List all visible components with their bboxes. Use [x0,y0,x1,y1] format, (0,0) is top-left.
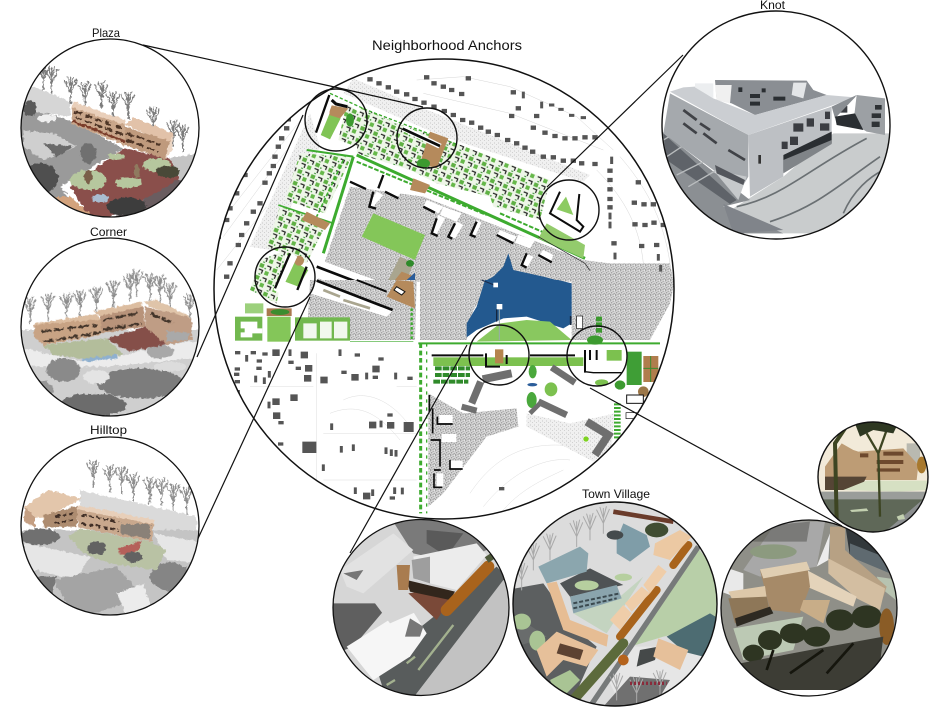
leader lines [143,45,842,553]
east trees and courts [527,317,658,442]
housing clusters [250,103,550,303]
ground [733,133,893,233]
right wing [832,95,857,118]
landscape islands [70,170,107,190]
stippled road verge north [343,78,590,182]
ring: Knot [539,180,599,240]
existing gray buildings [462,367,608,455]
water south [467,280,572,337]
west green blocks [235,303,350,342]
trees and blocks [23,130,77,160]
label: Hilltop: Hilltop [90,423,127,437]
panel: courtyard view small [813,418,933,537]
panel: site plan circle [214,59,675,519]
south half of plan [234,280,675,513]
building [72,102,125,127]
south black buildings [429,395,463,487]
panel: Plaza view [13,39,203,220]
leader: Knot to anchor [547,55,683,187]
greens [575,580,599,590]
stippled ground [317,187,675,290]
plan circle background [214,59,674,519]
leader: Plaza to anchor [143,45,423,107]
ground [22,110,123,198]
facades [663,93,748,197]
ring: Corner [305,89,367,151]
roof [670,87,855,135]
plan circle outline [214,59,674,519]
leader: street view to anchor [350,345,467,553]
ground [22,329,198,416]
road [375,567,507,700]
backdrop [907,443,920,463]
buildings [340,533,413,593]
building [825,443,918,480]
ground [507,497,727,713]
road [590,547,698,707]
ring: Hilltop [255,247,315,307]
long diagonal bars [310,280,415,317]
building [35,314,101,330]
tan buildings [830,527,887,607]
orange trees [620,545,688,637]
road curve [538,237,590,271]
leader: Hilltop to anchor [195,297,310,545]
leader: east views to anchor [590,388,842,526]
panel: Town Village view [507,497,727,713]
lawn [733,617,803,660]
ring: Plaza [397,108,457,168]
stippled ground south [307,280,417,340]
panel: street view [327,513,517,707]
heading: Neighborhood Anchors: Neighborhood Anchors [372,38,522,53]
town village buildings [432,304,622,373]
contour lines [250,353,577,510]
lawn [843,481,930,492]
curved lawn [477,320,572,342]
upper neighbors [80,490,197,543]
courtyard [43,338,123,358]
bare trees [515,507,666,703]
panel: Knot view [660,11,893,239]
plaza and tower [408,590,450,620]
town village lawn strip [433,357,583,366]
trees [835,428,845,520]
ground [17,530,207,620]
trees [743,605,882,662]
terraces [663,133,737,204]
ground [713,513,907,687]
bare trees [37,63,189,152]
leader: Corner to anchor [197,115,303,357]
panel: east model view [713,513,907,696]
anchor location rings [255,89,627,386]
bare trees [23,270,196,323]
vertical small buildings [523,92,661,287]
dark building [845,523,900,577]
stippled road verge west [250,113,320,250]
courtyard walls [715,80,827,115]
ring: street [469,325,529,385]
autumn trees [447,567,488,610]
label: Plaza: Plaza [92,26,120,40]
label: Corner: Corner [90,225,127,239]
tan buildings [547,582,608,647]
panel: Corner view [17,238,207,420]
blue-gray buildings [538,547,588,583]
green rows [433,368,470,382]
site plan drawing [216,77,675,513]
lawn [68,528,167,570]
white and black linear buildings [273,95,553,303]
ground [327,513,517,707]
green streets [278,93,585,258]
ring: east [567,326,627,386]
panel: Hilltop view [17,437,207,620]
neighborhood buildings [216,77,666,277]
label: Town Village: Town Village [582,487,650,501]
pier [482,280,494,286]
parcels [234,353,504,498]
building [25,490,82,520]
water north [486,253,558,281]
anchor lawns and plazas [285,105,585,287]
contour lines [217,77,670,270]
north half of plan [216,77,675,303]
green avenue lines [350,308,660,513]
